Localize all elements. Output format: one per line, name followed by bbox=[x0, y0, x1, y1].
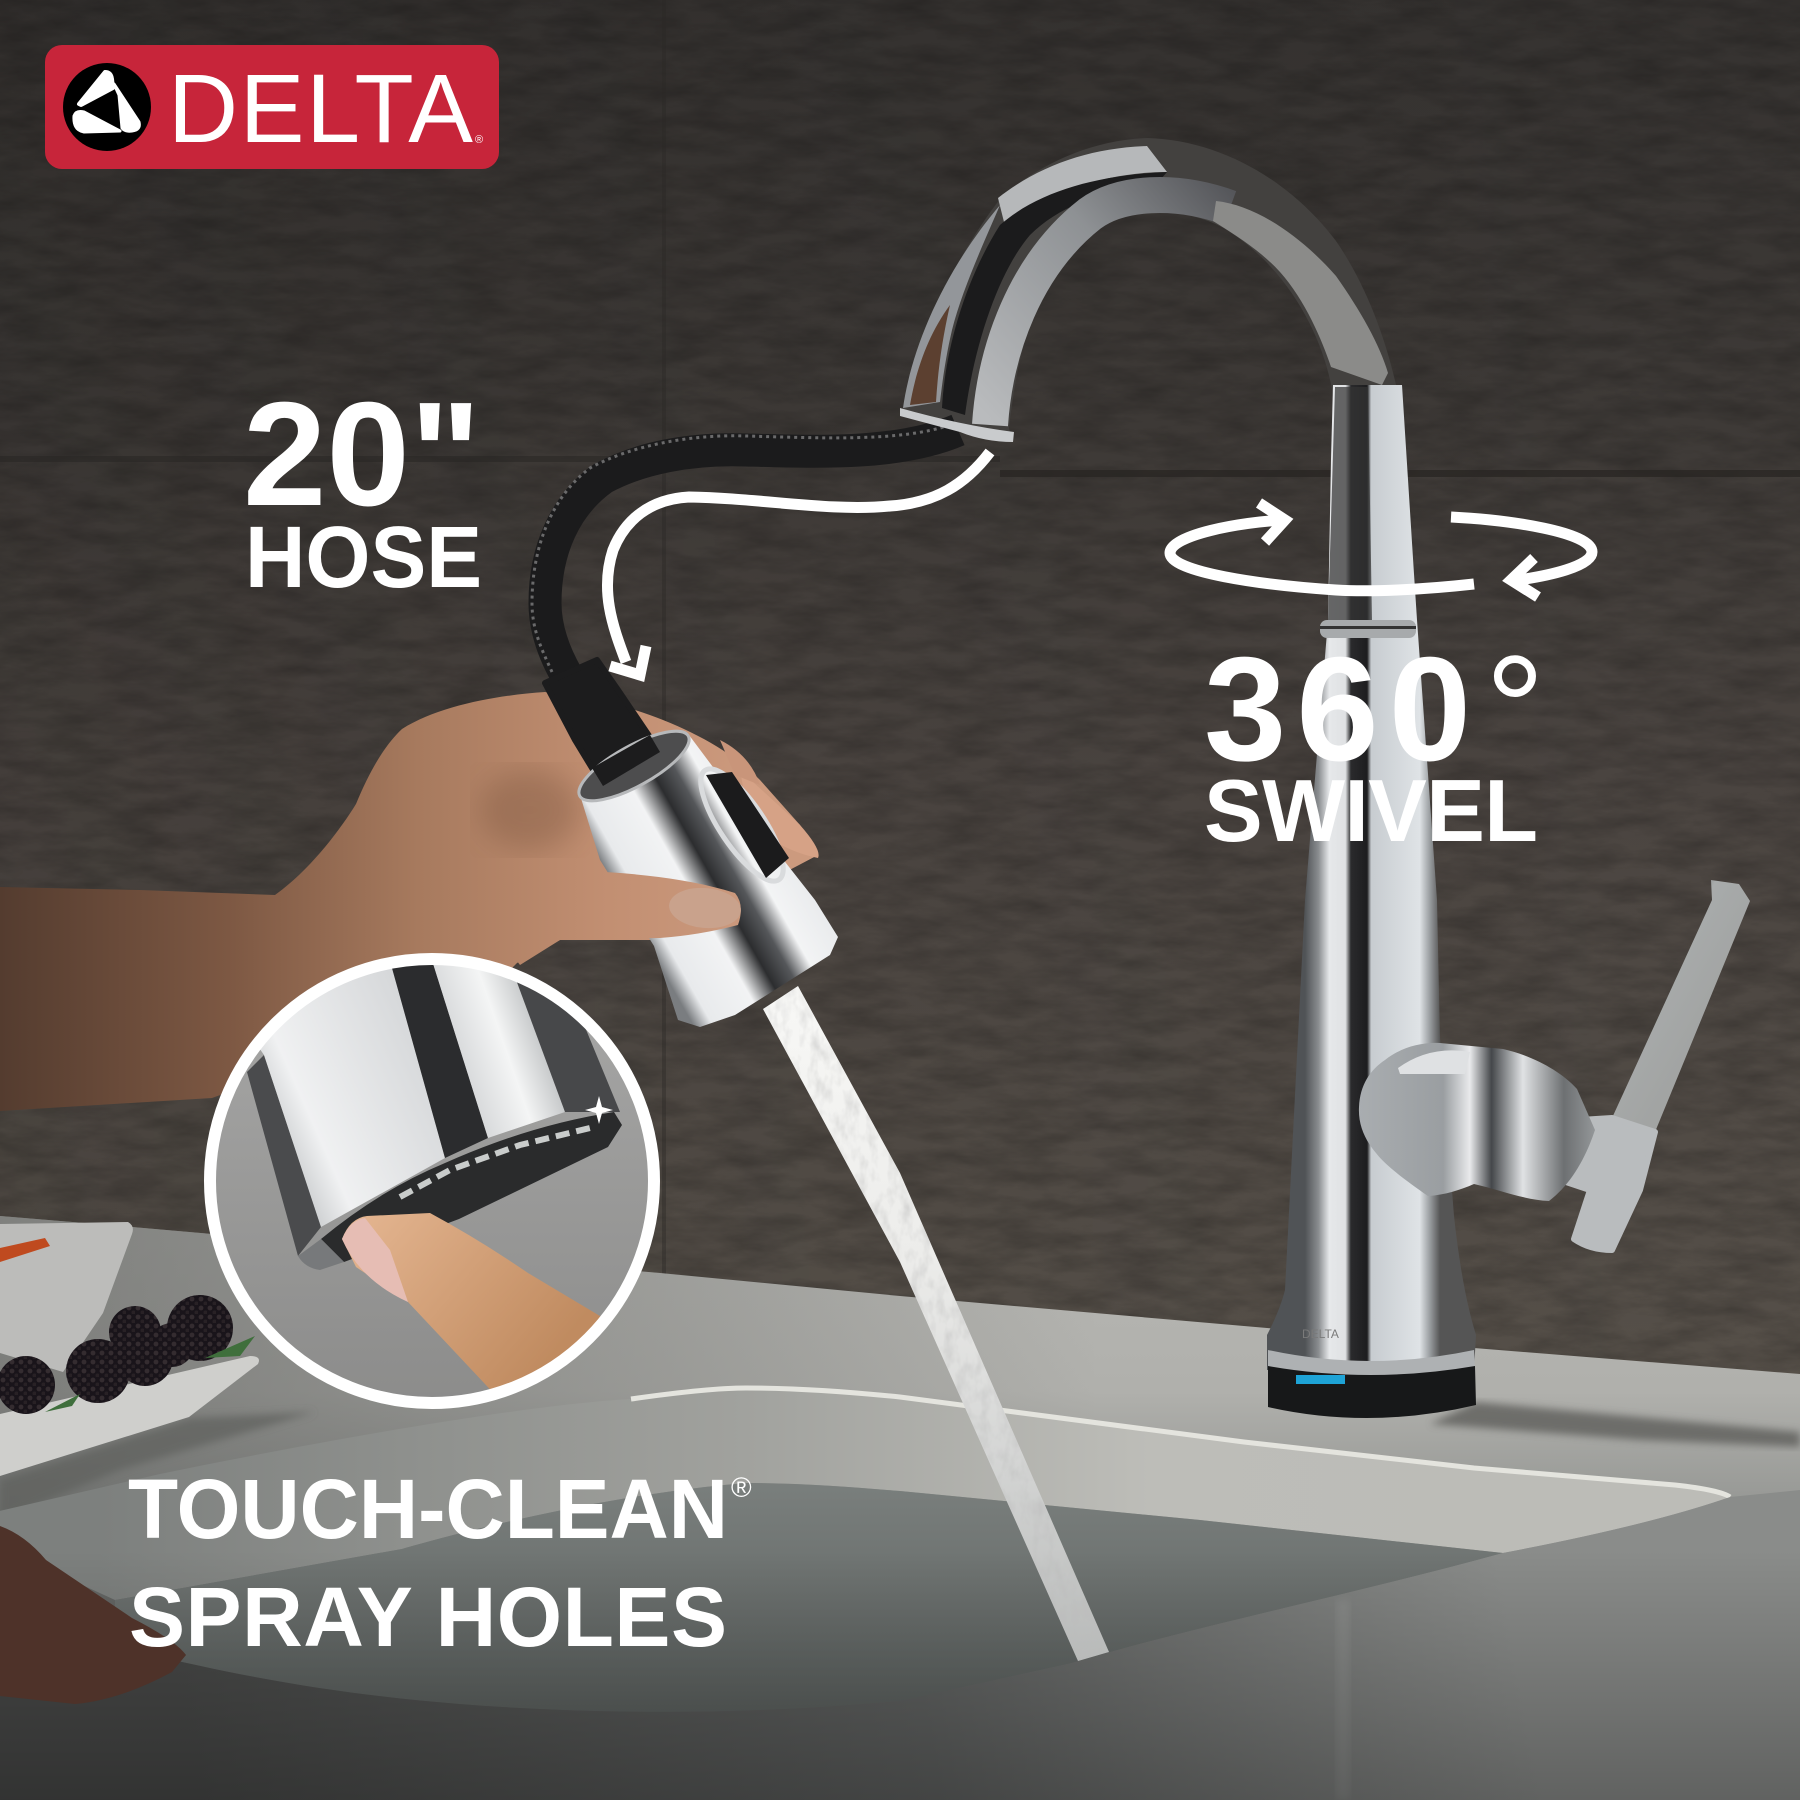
connector neck bbox=[592, 735, 660, 786]
sprayer bottom lip bbox=[298, 1239, 344, 1270]
faucet base mark: DELTA bbox=[1302, 1327, 1339, 1341]
label: 20 inch hose: 20" bbox=[243, 372, 481, 537]
sink rim bbox=[0, 1388, 1730, 1600]
faucet body stem bbox=[1267, 385, 1476, 1370]
hose connector bbox=[545, 660, 660, 786]
logo wordmark: DELTA bbox=[168, 54, 473, 163]
sprayer second light band bbox=[434, 965, 565, 1138]
label: touch-clean spray holes: ® bbox=[731, 1472, 752, 1503]
stem upper shade bbox=[1328, 387, 1372, 620]
fingertips bbox=[720, 740, 819, 858]
palm shadow bbox=[480, 770, 580, 850]
spray holes bbox=[400, 1128, 590, 1197]
counter reflection bbox=[1336, 1600, 1350, 1800]
spout top highlight bbox=[998, 146, 1167, 226]
spout nozzle reflection bbox=[903, 205, 1000, 408]
background wall bbox=[0, 0, 1800, 1400]
label: touch-clean spray holes: SPRAY HOLES bbox=[129, 1570, 727, 1664]
label: 20 inch hose: HOSE bbox=[245, 509, 482, 606]
spray head top rim bbox=[570, 718, 698, 814]
faucet silhouette bbox=[903, 138, 1417, 620]
hand and arm bbox=[0, 692, 818, 1111]
lever arm bbox=[1612, 880, 1750, 1132]
fingernail bbox=[342, 1218, 408, 1302]
bottom shading bbox=[0, 1550, 1800, 1800]
nozzle warm reflection bbox=[910, 305, 950, 405]
label: 360 degree swivel bbox=[1204, 624, 1545, 860]
label: 20 inch hose bbox=[243, 372, 482, 606]
sprayer light band bbox=[260, 968, 445, 1227]
sparkle bbox=[585, 1096, 613, 1124]
hub highlight bbox=[1398, 1050, 1470, 1074]
sprayer left edge bbox=[247, 1055, 321, 1256]
lower left hand bbox=[0, 1526, 186, 1704]
black touch base bbox=[1268, 1366, 1476, 1418]
spout dark band bbox=[942, 172, 1167, 415]
label: touch-clean spray holes: TOUCH-CLEAN bbox=[128, 1462, 728, 1556]
sprayer right dark band bbox=[517, 982, 620, 1112]
faucet bbox=[903, 138, 1750, 1418]
spout inner band bbox=[990, 195, 1230, 425]
sprayer dark band bbox=[392, 965, 488, 1158]
inset circle: touch-clean spray holes bbox=[210, 900, 654, 1403]
Delta logo badge bbox=[45, 45, 499, 169]
thumb nail bbox=[667, 885, 743, 931]
spray button bbox=[706, 772, 789, 878]
logo registered mark: ® bbox=[475, 134, 483, 146]
arrow: swivel rotation left bbox=[1170, 503, 1474, 591]
spout right reflection bbox=[1213, 201, 1388, 385]
base chrome ring bbox=[1268, 1350, 1475, 1377]
sprayer spray face bbox=[321, 1112, 622, 1262]
label: 360 degree swivel: 360 bbox=[1204, 627, 1471, 792]
label: touch-clean spray holes bbox=[128, 1462, 752, 1664]
blue LED strip bbox=[1296, 1375, 1345, 1384]
spray head bbox=[570, 718, 838, 1027]
countertop bbox=[0, 1216, 1800, 1800]
finger bbox=[342, 1213, 610, 1400]
water stream bbox=[763, 986, 1109, 1661]
lever joint bbox=[1560, 1118, 1655, 1250]
plate with blackberries bbox=[0, 1295, 259, 1476]
label: 360 degree swivel: ° bbox=[1485, 624, 1545, 792]
thumb bbox=[470, 870, 743, 965]
sink basin bbox=[115, 1483, 1503, 1712]
label: 360 degree swivel: SWIVEL bbox=[1204, 761, 1538, 860]
logo emblem bbox=[63, 63, 151, 151]
arrow: swivel rotation right bbox=[1451, 517, 1592, 597]
bowl of food bbox=[0, 1222, 133, 1372]
nozzle outlet bbox=[900, 408, 1014, 442]
rim highlight bbox=[631, 1388, 1730, 1497]
handle hub bbox=[1359, 1043, 1595, 1201]
pull-down hose bbox=[532, 425, 958, 676]
button surround bbox=[687, 758, 797, 892]
front counter bbox=[0, 1490, 1800, 1800]
swivel collar bbox=[1320, 620, 1416, 638]
arrow: hose pull-down bbox=[607, 452, 990, 675]
